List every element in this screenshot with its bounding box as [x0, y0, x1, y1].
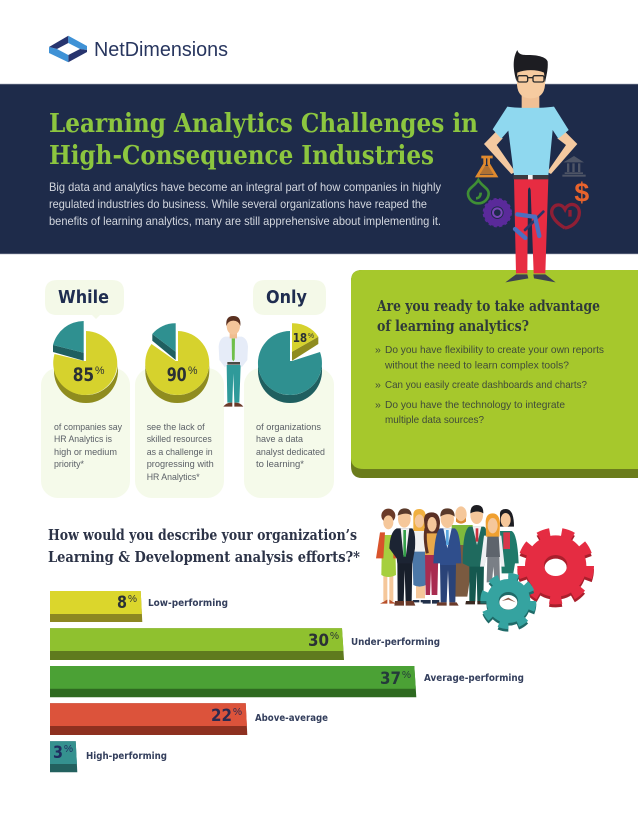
- pie: 18%: [258, 323, 322, 403]
- card text: to learning*: [256, 459, 304, 470]
- bubble: While: While: [58, 287, 109, 308]
- crowd of people and gears: [376, 505, 590, 628]
- bar: low-performing 8%: %: [128, 594, 137, 605]
- bar: average-performing 37%: %: [402, 670, 411, 681]
- pie: 18%: 18: [293, 331, 307, 345]
- pie: 90%: [145, 323, 209, 403]
- logo: NetDimensions: [49, 36, 228, 62]
- panel questions: Can you easily create dashboards and charts?: [385, 379, 587, 391]
- question heading: Learning & Development analysis efforts?*: [48, 549, 360, 566]
- card text: HR Analytics is: [54, 434, 112, 445]
- person: man in teal suit: [463, 505, 488, 604]
- title: High-Consequence Industries: [49, 141, 434, 171]
- small businessman figure: [219, 316, 248, 407]
- card text: [54, 422, 122, 470]
- intro text: [49, 180, 441, 228]
- panel questions: Do you have flexibility to create your own reports: [385, 344, 604, 356]
- bubble: Only: [253, 280, 326, 315]
- card text: high or medium: [54, 447, 117, 458]
- bubble: Only: Only: [266, 287, 307, 308]
- panel questions: multiple data sources?: [385, 414, 484, 426]
- person: man in blue suit: [433, 508, 461, 606]
- icon: drop: [468, 180, 489, 203]
- bar: high-performing 3%: %: [64, 744, 73, 755]
- pie: 18%: %: [308, 333, 314, 340]
- logo: NetDimensions: NetDimensions: [94, 39, 228, 61]
- card text: see the lack of: [147, 422, 205, 433]
- icon: bank: [562, 156, 586, 177]
- panel questions: Do you have the technology to integrate: [385, 399, 565, 411]
- intro text: benefits of learning analytics, many are still apprehensive about implementing it.: [49, 214, 441, 228]
- bar: low-performing 8%: [50, 591, 228, 622]
- title: Learning Analytics Challenges in: [49, 109, 478, 139]
- bar: low-performing 8%: Low-performing: [148, 598, 228, 609]
- icon: red gear: [521, 532, 590, 603]
- card text: priority*: [54, 459, 84, 470]
- bar: average-performing 37%: 37: [380, 669, 401, 689]
- card text: as a challenge in: [147, 447, 213, 458]
- person: woman in green dress: [376, 509, 397, 604]
- bar: high-performing 3%: High-performing: [86, 751, 167, 762]
- card text: HR Analytics*: [147, 472, 200, 483]
- person: bearded man: [452, 506, 473, 597]
- panel questions: »: [375, 399, 381, 411]
- pie: 90%: %: [188, 365, 198, 377]
- pie: 85%: 85: [73, 364, 94, 386]
- card text: have a data: [256, 434, 304, 445]
- bar: under-performing 30%: 30: [308, 631, 329, 651]
- icon: wind turbine: [515, 212, 543, 238]
- icon: flask: [477, 157, 496, 176]
- character with industry icons: [468, 50, 589, 282]
- panel: are you ready: [351, 270, 638, 478]
- icon: teal gear: [484, 576, 533, 628]
- bar: average-performing 37%: Average-performing: [424, 673, 524, 684]
- bar: above-average 22%: Above-average: [255, 713, 328, 724]
- bar: above-average 22%: %: [233, 707, 242, 718]
- icon: gear: [484, 199, 511, 226]
- card: 85%: [41, 321, 130, 498]
- intro text: Big data and analytics have become an integral part of how companies in highly: [49, 180, 441, 194]
- person: woman in grey vest: [480, 513, 505, 582]
- icon: dollar: $: [574, 178, 589, 208]
- bar: high-performing 3%: 3: [53, 743, 63, 763]
- person: woman with dark hair: [500, 509, 519, 573]
- panel heading: [376, 298, 600, 335]
- bar: high-performing 3%: [50, 741, 167, 772]
- card text: [256, 422, 325, 470]
- card text: analyst dedicated: [256, 447, 325, 458]
- bar: under-performing 30%: [50, 628, 440, 660]
- bar: low-performing 8%: 8: [117, 593, 127, 613]
- card text: skilled resources: [147, 434, 212, 445]
- figure body: [484, 50, 577, 282]
- title: [49, 109, 478, 171]
- card: 18%: [244, 323, 334, 498]
- panel heading: of learning analytics?: [377, 318, 529, 335]
- question heading: How would you describe your organization’s: [48, 527, 357, 544]
- bubble: While: [45, 280, 124, 319]
- bar: average-performing 37%: [50, 666, 524, 697]
- card text: [147, 422, 214, 483]
- bar: under-performing 30%: Under-performing: [351, 637, 440, 648]
- bar chart: [50, 591, 524, 772]
- panel questions: »: [375, 344, 381, 356]
- pie: 85%: [53, 321, 118, 403]
- question heading: [48, 527, 360, 566]
- bar: above-average 22%: [50, 703, 328, 735]
- card text: of organizations: [256, 422, 321, 433]
- panel questions: »: [375, 379, 381, 391]
- person: woman with braid: [423, 512, 440, 604]
- card: 90%: [135, 323, 224, 498]
- panel questions: [375, 344, 604, 426]
- person: man in black suit: [389, 508, 415, 606]
- icon: heart: [552, 204, 579, 228]
- person: blonde woman: [412, 509, 427, 602]
- panel questions: without the need to learn complex tools?: [384, 360, 569, 372]
- bar: under-performing 30%: %: [330, 631, 339, 642]
- header band: [0, 84, 638, 254]
- pie: 90%: 90: [167, 364, 187, 386]
- pie: 85%: %: [95, 365, 105, 377]
- card text: of companies say: [54, 422, 122, 433]
- intro text: regulated industries do business. While several organizations have reaped the: [49, 197, 427, 211]
- bar: above-average 22%: 22: [211, 706, 232, 726]
- card text: progressing with: [147, 459, 214, 470]
- panel heading: Are you ready to take advantage: [376, 298, 600, 315]
